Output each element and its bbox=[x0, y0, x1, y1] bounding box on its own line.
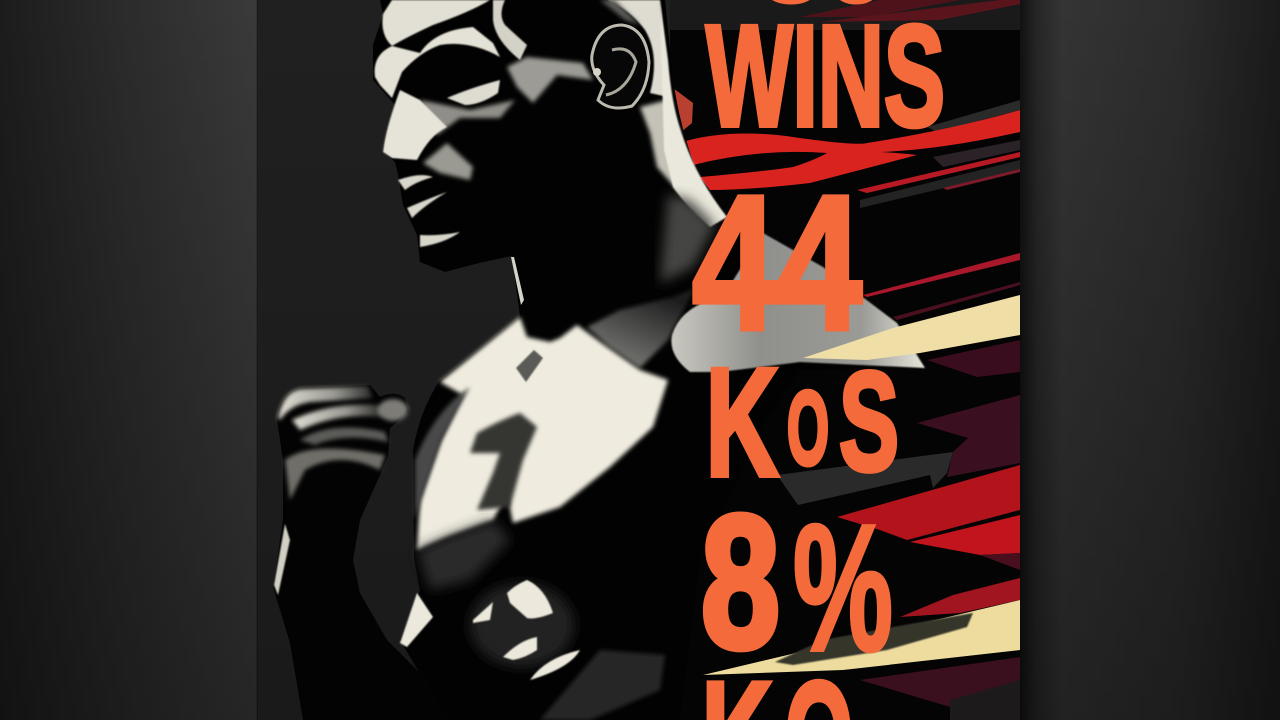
stat number: 8%: 8 bbox=[701, 477, 780, 688]
stat label: KoS: K bbox=[706, 337, 778, 508]
outer chest band bbox=[415, 387, 470, 520]
trapezius midtone bbox=[587, 288, 695, 368]
red wedges bbox=[837, 465, 1020, 540]
boxer silhouette bbox=[273, 0, 925, 720]
abdominal midtones bbox=[540, 650, 665, 720]
fist highlights bbox=[278, 386, 408, 500]
forearm rim bbox=[274, 524, 290, 595]
nose highlight bbox=[383, 90, 447, 160]
body and head silhouette bbox=[373, 0, 694, 720]
back of neck rim bbox=[660, 0, 727, 227]
stat number: 8% bbox=[701, 477, 893, 689]
dark smear on cream streak bbox=[775, 613, 973, 665]
stat label: KoS bbox=[706, 337, 899, 508]
lips bbox=[398, 175, 460, 247]
under-eye midtone bbox=[420, 100, 515, 135]
cream streak lower bbox=[703, 600, 1020, 675]
lower maroon streak bbox=[860, 657, 1020, 710]
lower chest midtone bbox=[417, 520, 510, 590]
cheek under eye bbox=[447, 80, 500, 105]
collarbone mark bbox=[516, 350, 543, 382]
brow highlight bbox=[375, 27, 500, 98]
maroon wedge bbox=[917, 395, 1020, 477]
upper skull highlight bbox=[493, 0, 527, 60]
stat number: 44: 44 bbox=[692, 155, 862, 370]
head top highlight bbox=[382, 0, 490, 46]
graphic speed streaks bbox=[673, 0, 1020, 720]
stat label: KoS: S bbox=[839, 342, 899, 500]
cream streak over shoulder bbox=[803, 295, 1020, 360]
stat label: WINS: WINS bbox=[706, 0, 945, 156]
poster backdrop bbox=[258, 0, 1020, 720]
big chest highlight bbox=[417, 317, 668, 550]
red ribbon bbox=[682, 110, 1020, 190]
raised fist and arm bbox=[273, 385, 447, 720]
crown midtone bbox=[600, 0, 640, 25]
grey arrow streak bbox=[777, 452, 953, 505]
stat number: 8%: % bbox=[793, 488, 893, 689]
shoulder bbox=[671, 233, 925, 372]
crown highlight bbox=[607, 0, 668, 97]
neck front rim bbox=[511, 257, 524, 305]
behind ear neck highlight bbox=[640, 100, 680, 193]
abdominal highlights bbox=[400, 580, 580, 680]
ear bbox=[592, 25, 649, 108]
torso midtone bbox=[470, 583, 574, 667]
neck midtone bbox=[660, 195, 715, 283]
stat label: KoS: O bbox=[787, 371, 829, 487]
temple midtone bbox=[507, 57, 593, 103]
poster bbox=[258, 0, 1020, 720]
cheek midtone bbox=[423, 143, 473, 180]
pec shadow bbox=[470, 413, 537, 510]
